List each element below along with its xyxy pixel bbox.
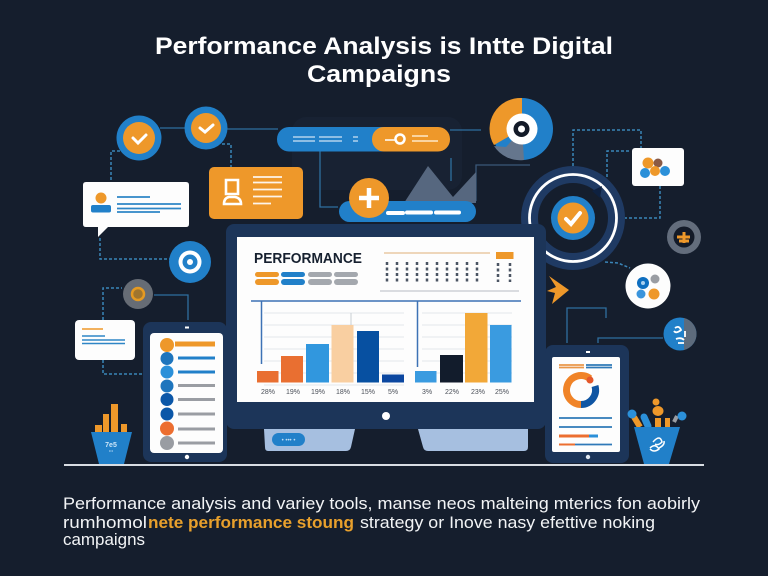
axis labels: 25% [495, 389, 509, 396]
tablet: list [143, 322, 227, 462]
speech bubble card [83, 182, 189, 237]
bar chart: left [257, 313, 404, 385]
bucket icon: left [91, 404, 132, 464]
orange profile card [209, 167, 303, 219]
axis labels: 15% [361, 389, 375, 396]
title [155, 33, 613, 88]
description text [63, 494, 701, 549]
dashed connectors [100, 130, 660, 374]
axis labels: 18% [336, 389, 350, 396]
bucket icon: left: 7e5 [105, 442, 117, 449]
icon card: four dots [632, 148, 684, 186]
axis labels: 22% [445, 389, 459, 396]
axis labels: 28% [261, 389, 275, 396]
bucket icon: right [628, 398, 686, 464]
legend swatches [255, 272, 358, 285]
report donut [567, 376, 596, 405]
axis labels: 3% [422, 389, 432, 396]
stand button: • ••• • [282, 438, 295, 444]
icon: gray coin badge [123, 279, 153, 309]
icon: gray badge [667, 220, 701, 254]
axis labels: 19% [311, 389, 325, 396]
icon: link badge [664, 318, 696, 350]
heading: performance: PERFORMANCE [254, 251, 362, 267]
description text: nete performance stoung [148, 513, 354, 532]
tablet: donut report [545, 345, 629, 463]
icon: target badge [169, 241, 211, 283]
arrow [547, 276, 569, 304]
progress pill [277, 127, 450, 152]
monitor [226, 224, 546, 451]
axis labels: 19% [286, 389, 300, 396]
stand button [272, 433, 305, 446]
text card [75, 320, 135, 360]
axis labels: 5% [388, 389, 398, 396]
axis labels: 23% [471, 389, 485, 396]
mountain chart and plus pill [339, 166, 476, 222]
description text: strategy or Inove nasy efettive noking [360, 513, 655, 532]
icon: dots circle [626, 264, 670, 308]
chart axes [251, 301, 521, 367]
bar chart: right [415, 313, 512, 382]
title: Campaigns [307, 61, 451, 88]
connector lines [154, 128, 663, 343]
data table strip [380, 252, 519, 291]
donut chart [490, 98, 553, 160]
description text: rumhomol [63, 513, 147, 532]
baseline [64, 464, 704, 466]
target icon [521, 166, 625, 270]
description text: Performance analysis and variey tools, manse neos malteing mterics fon aobirly [63, 494, 701, 513]
description text: campaigns [63, 530, 145, 549]
title: Performance Analysis is Intte Digital [155, 33, 613, 60]
list rows [160, 338, 215, 450]
bucket icon: left: ••• [109, 448, 114, 453]
icon: check badge 1 [116, 116, 162, 160]
icon: check badge 2 [184, 106, 228, 150]
axis labels [261, 389, 509, 396]
